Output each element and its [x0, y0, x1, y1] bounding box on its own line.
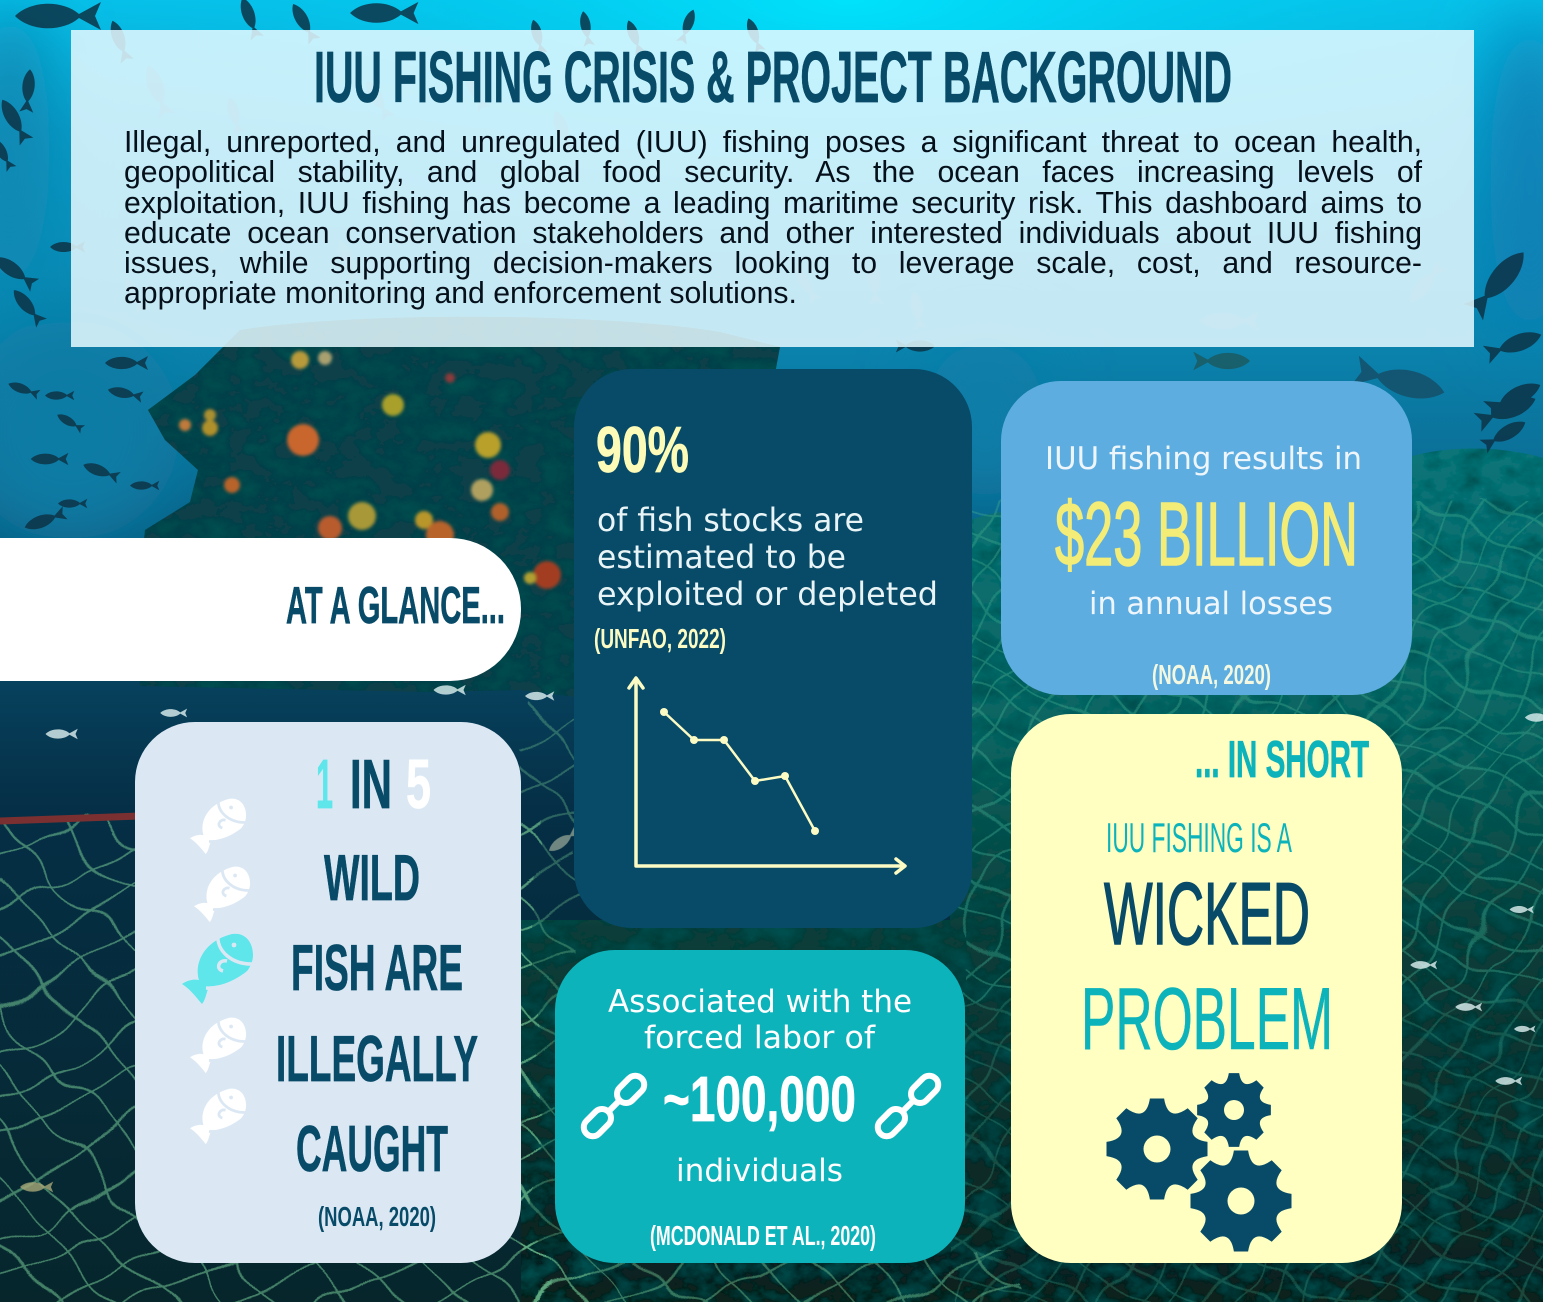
text: wild fish are illegally caught: CAUGHT [296, 1112, 448, 1185]
text: problem: PROBLEM [1081, 969, 1333, 1068]
icon: chain right [874, 1072, 942, 1140]
text: fish stocks: exploited or depleted [597, 575, 938, 613]
stat: 90%: 90% [596, 413, 689, 486]
icon: gears [1106, 1073, 1292, 1252]
text: wild fish are illegally caught: FISH ARE [291, 931, 463, 1004]
text: associated with: forced labor of [644, 1020, 876, 1056]
text: individuals: individuals [676, 1153, 843, 1189]
citation: McDonald: (MCDONALD ET AL., 2020) [650, 1220, 876, 1251]
text block: intro paragraph: exploitation, IUU fishing has become a leading maritime security risk. This dashboard aims to [124, 187, 1422, 220]
text: wild fish are illegally caught: ILLEGALLY [276, 1022, 478, 1095]
citation: NOAA: (NOAA, 2020) [1152, 659, 1271, 690]
heading: 1 in 5: IN [350, 745, 392, 823]
text: wicked: WICKED [1104, 864, 1310, 963]
panel: in short [1011, 714, 1402, 1263]
text block: intro paragraph: appropriate monitoring and enforcement solutions. [124, 277, 797, 310]
right reef [521, 448, 1543, 1302]
stat: 100,000: ~100,000 [663, 1063, 856, 1135]
text: associated with: Associated with the [608, 984, 912, 1020]
left reef [138, 317, 780, 700]
text block: intro paragraph: Illegal, unreported, and unregulated (IUU) fishing poses a significant threat to ocean health, [124, 126, 1422, 159]
citation: UNFAO: (UNFAO, 2022) [594, 623, 726, 654]
icon: white fish 4 [190, 1018, 247, 1073]
text: annual losses: in annual losses [1089, 586, 1333, 622]
icon: white fish 2 [194, 867, 251, 922]
panel: at a glance: AT A GLANCE... [286, 577, 505, 635]
panel: 90% fish stocks [574, 369, 972, 928]
text: IUU fishing is a: IUU FISHING IS A [1106, 814, 1292, 861]
panel: at a glance [0, 538, 521, 681]
citation: NOAA: (NOAA, 2020) [318, 1201, 436, 1232]
icon: highlighted fish [182, 934, 254, 1004]
text: fish stocks: of fish stocks are [597, 501, 864, 539]
heading: 1 in 5 [316, 745, 431, 823]
icon: white fish 5 [190, 1089, 247, 1144]
line chart: declining fish stocks [629, 678, 905, 873]
text block: intro paragraph [124, 126, 1422, 310]
panel: $23 billion [1001, 381, 1412, 695]
text: associated with [608, 984, 912, 1056]
panel: 1 in 5 [135, 722, 521, 1263]
heading: in short: ... IN SHORT [1195, 731, 1369, 789]
icon: white fish 1 [190, 799, 247, 854]
panel: header [71, 30, 1474, 347]
text: fish stocks [597, 501, 938, 613]
heading: 1 in 5: 1 [316, 745, 333, 823]
text: fish stocks: estimated to be [597, 538, 846, 576]
heading: 1 in 5: 5 [406, 745, 431, 823]
text block: intro paragraph: issues, while supporting decision-makers looking to leverage scale, cost, and resource- [124, 247, 1422, 280]
text: wild fish are illegally caught [276, 841, 478, 1185]
icon: chain left [580, 1072, 648, 1140]
text block: intro paragraph: educate ocean conservation stakeholders and other interested individuals about IUU fishing [124, 217, 1422, 250]
panel: forced labor [555, 950, 965, 1263]
text: results in: IUU fishing results in [1045, 441, 1362, 477]
text block: intro paragraph: geopolitical stability, and global food security. As the ocean faces increasing levels of [124, 156, 1422, 189]
text: wild fish are illegally caught: WILD [324, 841, 420, 914]
